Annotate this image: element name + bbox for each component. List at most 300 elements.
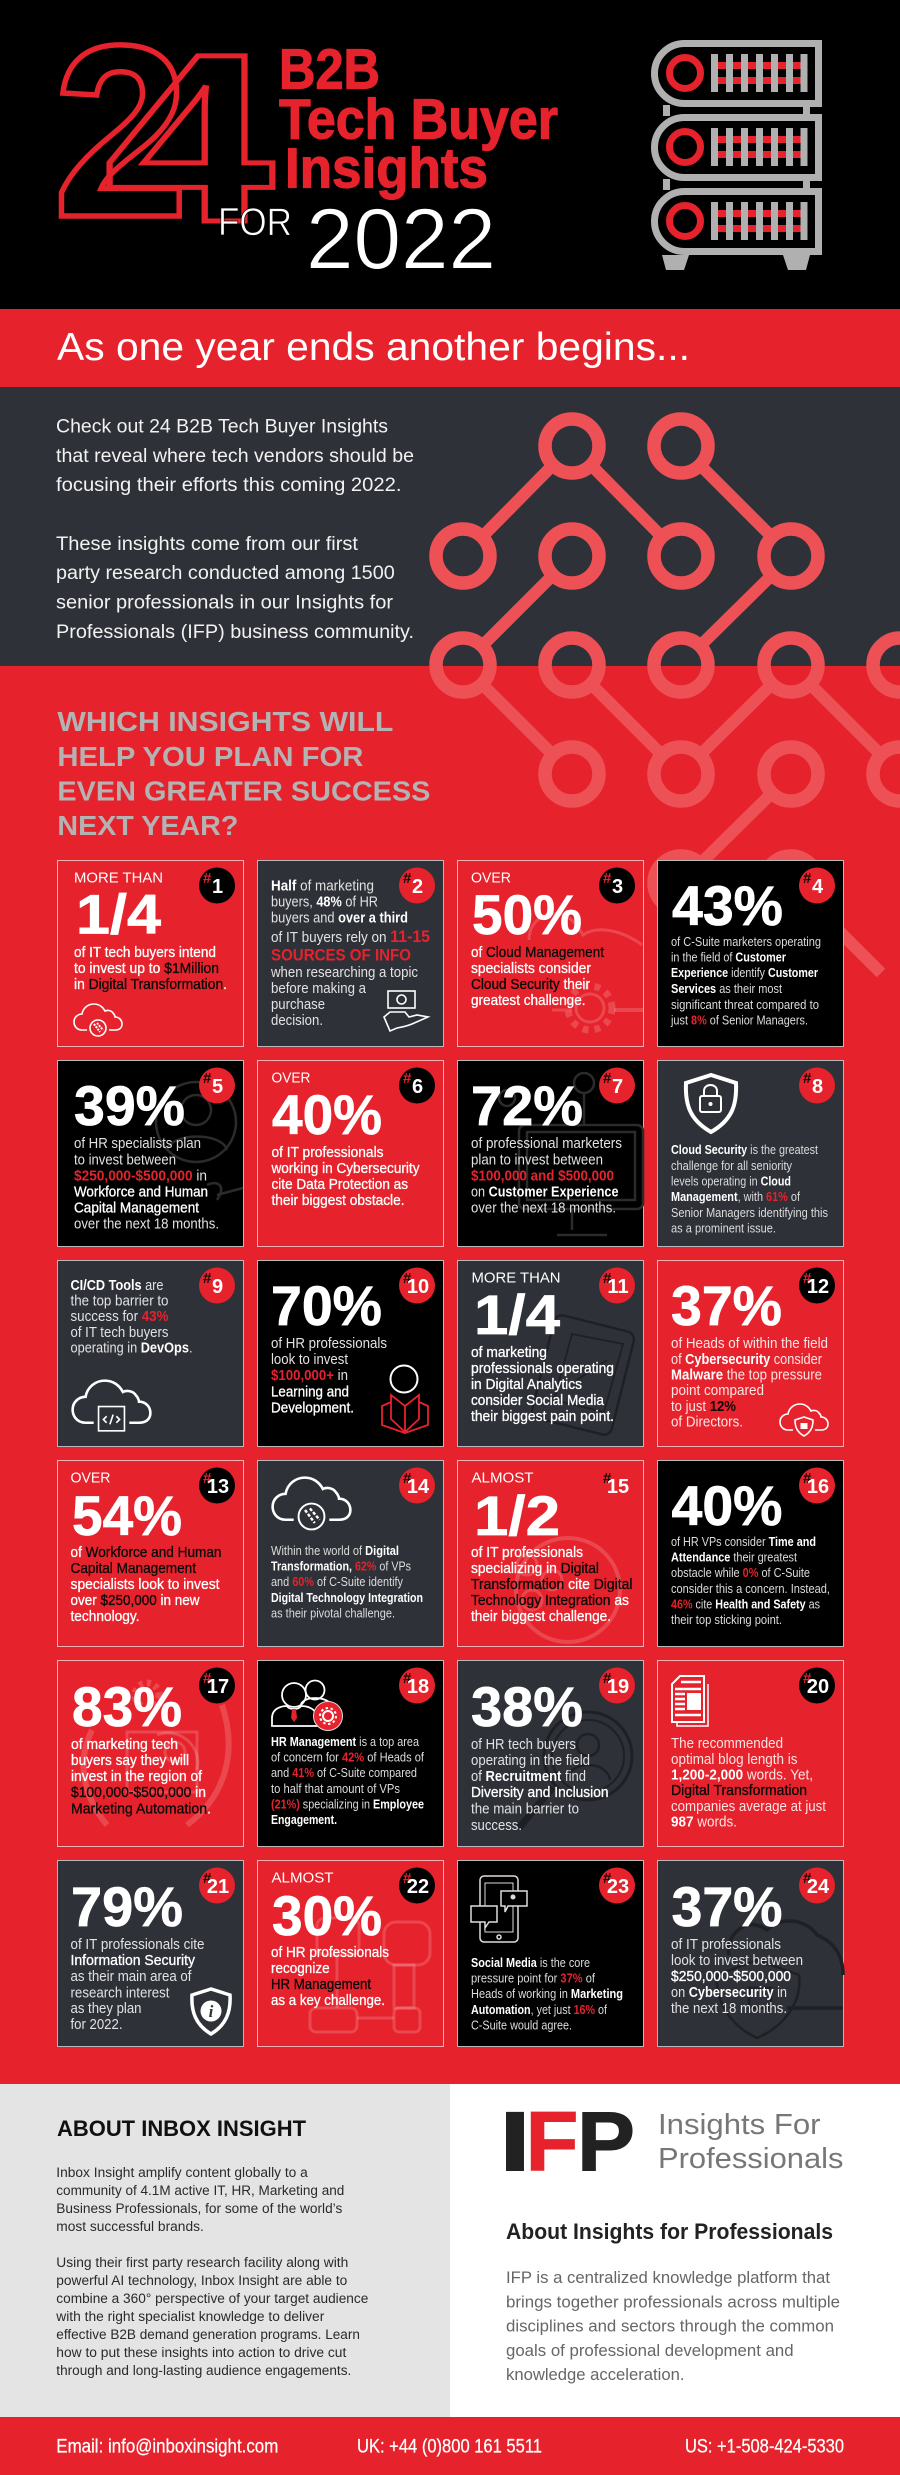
text 2: before making a bbox=[271, 981, 367, 997]
text 9: CI/CD Tools are bbox=[70, 1278, 164, 1294]
logo: IFP bbox=[499, 2095, 844, 2189]
text 12: of Heads of within the field bbox=[671, 1336, 828, 1352]
text 8: challenge for all seniority bbox=[671, 1158, 792, 1173]
text 1 bbox=[74, 945, 227, 993]
text 6: cite Data Protection as bbox=[272, 1177, 408, 1193]
badge 9: # bbox=[203, 1270, 212, 1287]
text 14: Within the world of Digital bbox=[271, 1543, 399, 1558]
text 12: to just 12% bbox=[671, 1399, 736, 1415]
badge 13: 13 bbox=[207, 1476, 229, 1498]
text 24 bbox=[671, 1937, 803, 2017]
text 19: success. bbox=[471, 1818, 522, 1834]
text 5 bbox=[74, 1136, 219, 1233]
text 2 bbox=[270, 879, 430, 1029]
badge 24 bbox=[799, 1868, 835, 1904]
card 8 bbox=[658, 1060, 844, 1246]
title: 2022 bbox=[306, 191, 496, 287]
badge 20 bbox=[799, 1668, 835, 1704]
card 17 bbox=[58, 1660, 244, 1846]
intro text: that reveal where tech vendors should be bbox=[56, 446, 414, 467]
text 22 bbox=[271, 1945, 389, 2009]
text 13: of Workforce and Human bbox=[70, 1545, 222, 1561]
badge 24: 24 bbox=[807, 1876, 830, 1898]
text 6: working in Cybersecurity bbox=[271, 1161, 420, 1177]
text 20: Digital Transformation bbox=[671, 1783, 807, 1799]
text 21: for 2022. bbox=[70, 2017, 122, 2033]
badge 23: 23 bbox=[607, 1876, 629, 1898]
text 16: obstacle while 0% of C-Suite bbox=[671, 1565, 810, 1580]
text 16: Attendance their greatest bbox=[671, 1550, 797, 1565]
header panel bbox=[0, 0, 900, 309]
badge 3 bbox=[599, 868, 635, 904]
icon: reader bbox=[382, 1366, 428, 1433]
card 23 bbox=[458, 1860, 644, 2046]
text 14 bbox=[271, 1543, 423, 1621]
icon: phone chat bbox=[471, 1876, 527, 1942]
stat 50%: OVER bbox=[471, 871, 511, 887]
badge 20: 20 bbox=[807, 1676, 829, 1698]
badge 4 bbox=[799, 868, 835, 904]
text 15: Technology Integration as bbox=[471, 1593, 629, 1609]
text 2: SOURCES OF INFO bbox=[271, 946, 411, 965]
logo: IFP: Professionals bbox=[658, 2143, 844, 2175]
network pattern bbox=[436, 419, 900, 973]
text 3: specialists consider bbox=[471, 961, 591, 977]
text 7: $100,000 and $500,000 bbox=[471, 1169, 614, 1185]
badge 12: # bbox=[803, 1270, 812, 1287]
title: Insights bbox=[285, 137, 488, 201]
text 24: on Cybersecurity in bbox=[671, 1985, 787, 2001]
panel: about inbox insight: powerful AI technology, Inbox Insight are able to bbox=[56, 2273, 347, 2288]
text 5: of HR specialists plan bbox=[74, 1136, 201, 1152]
stat 79%: 79% bbox=[71, 1875, 183, 1938]
heading: which insights: WHICH INSIGHTS WILL bbox=[57, 706, 393, 737]
text 18: and 41% of C-Suite compared bbox=[271, 1765, 417, 1780]
footer contact bar: UK: +44 (0)800 161 5511 bbox=[357, 2437, 542, 2458]
badge 19: # bbox=[603, 1670, 612, 1687]
panel: about ifp: About Insights for Professionals bbox=[506, 2219, 833, 2244]
text 4: just 8% of Senior Managers. bbox=[670, 1012, 808, 1028]
badge 9: 9 bbox=[212, 1276, 223, 1298]
text 4: Experience identify Customer bbox=[671, 965, 818, 980]
badge 3: # bbox=[603, 870, 612, 887]
text 9: the top barrier to bbox=[70, 1294, 168, 1310]
badge 22: 22 bbox=[407, 1876, 429, 1898]
text 17: $100,000-$500,000 in bbox=[71, 1785, 206, 1801]
intro text: senior professionals in our Insights for bbox=[56, 593, 394, 614]
badge 9 bbox=[199, 1268, 235, 1304]
icon: background monitor bbox=[499, 1073, 643, 1235]
text 23: pressure point for 37% of bbox=[471, 1971, 595, 1986]
text 18: to half that amount of VPs bbox=[271, 1781, 400, 1796]
text 2: purchase bbox=[271, 997, 325, 1013]
card 20 bbox=[658, 1660, 844, 1846]
text 19: the main barrier to bbox=[471, 1802, 579, 1818]
text 8: levels operating in Cloud bbox=[671, 1174, 791, 1189]
badge 7: # bbox=[603, 1070, 612, 1087]
text 23: Heads of working in Marketing bbox=[471, 1986, 623, 2001]
card 9 bbox=[58, 1260, 244, 1446]
text 11: their biggest pain point. bbox=[471, 1409, 614, 1425]
text 13: over $250,000 in new bbox=[70, 1593, 200, 1609]
title: 2 bbox=[53, 0, 189, 268]
panel: about ifp: disciplines and sectors through the common bbox=[506, 2318, 834, 2336]
logo: IFP: F bbox=[526, 2095, 578, 2189]
badge 13 bbox=[199, 1468, 235, 1504]
badge 3: 3 bbox=[612, 876, 623, 898]
stat 40%: OVER bbox=[272, 1071, 310, 1087]
text 5: to invest between bbox=[74, 1153, 176, 1169]
text 8: Cloud Security is the greatest bbox=[671, 1142, 818, 1157]
logo: IFP: Insights For bbox=[658, 2109, 821, 2141]
text 3: Cloud Security their bbox=[471, 977, 590, 993]
card 11 bbox=[458, 1260, 644, 1446]
title bbox=[53, 0, 558, 287]
badge 10: 10 bbox=[407, 1276, 429, 1298]
title: Tech Buyer bbox=[279, 88, 558, 152]
text 4: of C-Suite marketers operating bbox=[671, 934, 821, 949]
text 11: professionals operating bbox=[471, 1361, 614, 1377]
text 3 bbox=[471, 945, 604, 1009]
badge 14 bbox=[399, 1468, 435, 1504]
text 12: of Cybersecurity consider bbox=[671, 1352, 822, 1368]
panel: about ifp: knowledge acceleration. bbox=[506, 2366, 684, 2384]
badge 14: 14 bbox=[407, 1476, 430, 1498]
icon: background automation cycle bbox=[84, 1683, 229, 1825]
badge 21: 21 bbox=[207, 1876, 229, 1898]
stat 83%: 83% bbox=[72, 1675, 182, 1738]
text 8 bbox=[671, 1142, 828, 1236]
text 14: and 60% of C-Suite identify bbox=[271, 1574, 403, 1589]
stat 1/2: ALMOST bbox=[472, 1471, 534, 1487]
badge 11 bbox=[599, 1268, 635, 1304]
text 5: Capital Management bbox=[74, 1201, 199, 1217]
stat 37%: 37% bbox=[672, 1875, 782, 1938]
footer contact bar: Email: info@inboxinsight.com bbox=[56, 2437, 278, 2458]
text 20: 987 words. bbox=[671, 1815, 737, 1831]
text 14: Digital Technology Integration bbox=[271, 1590, 423, 1605]
text 23: C-Suite would agree. bbox=[471, 2018, 572, 2033]
icon: money in hand bbox=[384, 991, 428, 1031]
text 20: The recommended bbox=[671, 1736, 783, 1752]
text 12: of Directors. bbox=[671, 1415, 743, 1431]
stat 40%: 40% bbox=[672, 1474, 782, 1537]
badge 1: 1 bbox=[212, 876, 223, 898]
footer contact bar bbox=[0, 2417, 900, 2475]
text 15: of IT professionals bbox=[471, 1545, 583, 1561]
text 8: Management, with 61% of bbox=[671, 1189, 800, 1204]
text 5: $250,000-$500,000 in bbox=[74, 1169, 207, 1185]
text 20: 1,200-2,000 words. Yet, bbox=[671, 1768, 813, 1784]
badge 21: # bbox=[203, 1870, 212, 1887]
text 13: Capital Management bbox=[70, 1561, 196, 1577]
card 10 bbox=[258, 1260, 444, 1446]
intro text: Professionals (IFP) business community. bbox=[56, 622, 414, 643]
text 2: when researching a topic bbox=[270, 965, 418, 981]
panel: about ifp: brings together professionals across multiple bbox=[506, 2294, 840, 2312]
badge 18 bbox=[399, 1668, 435, 1704]
panel: about inbox insight: community of 4.1M active IT, HR, Marketing and bbox=[56, 2183, 344, 2198]
stat 54%: OVER bbox=[70, 1471, 110, 1487]
badge 12: 12 bbox=[807, 1276, 829, 1298]
stat 43%: 43% bbox=[672, 874, 783, 937]
text 19: of Recruitment find bbox=[471, 1769, 586, 1785]
text 23 bbox=[471, 1955, 623, 2033]
badge 2 bbox=[399, 868, 435, 904]
text 10: look to invest bbox=[271, 1352, 348, 1368]
badge 1: # bbox=[203, 870, 212, 887]
heading: which insights: NEXT YEAR? bbox=[57, 810, 238, 841]
icon: cloud code bbox=[73, 1381, 150, 1431]
text 4: significant threat compared to bbox=[671, 997, 819, 1012]
text 22: HR Management bbox=[271, 1977, 371, 1993]
text 23: Social Media is the core bbox=[471, 1955, 590, 1970]
badge 8 bbox=[799, 1068, 835, 1104]
text 24: the next 18 months. bbox=[671, 2001, 787, 2017]
text 16: of HR VPs consider Time and bbox=[671, 1534, 816, 1549]
stat 1/4: MORE THAN bbox=[472, 1271, 560, 1287]
text 22: as a key challenge. bbox=[271, 1993, 385, 2009]
text 13 bbox=[70, 1545, 222, 1625]
badge 15: # bbox=[603, 1470, 612, 1487]
text 19: Diversity and Inclusion bbox=[471, 1785, 608, 1801]
badge 16: 16 bbox=[807, 1476, 829, 1498]
badge 5: # bbox=[203, 1070, 212, 1087]
text 21 bbox=[70, 1937, 204, 2033]
badge 7 bbox=[599, 1068, 635, 1104]
text 1: of IT tech buyers intend bbox=[74, 945, 216, 961]
card 1 bbox=[58, 860, 244, 1046]
intro text: Check out 24 B2B Tech Buyer Insights bbox=[56, 417, 388, 438]
badge 11: # bbox=[603, 1270, 612, 1287]
text 2: decision. bbox=[271, 1013, 323, 1029]
text 21: as they plan bbox=[70, 2001, 142, 2017]
text 10: of HR professionals bbox=[271, 1336, 387, 1352]
text 17: invest in the region of bbox=[71, 1769, 203, 1785]
text 18: (21%) specializing in Employee bbox=[271, 1797, 424, 1812]
text 7: of professional marketers bbox=[471, 1136, 622, 1152]
text 7: on Customer Experience bbox=[471, 1185, 618, 1201]
text 16 bbox=[671, 1534, 830, 1627]
text 20 bbox=[671, 1736, 826, 1831]
text 9: operating in DevOps. bbox=[70, 1341, 192, 1357]
text 14: as their pivotal challenge. bbox=[271, 1606, 395, 1621]
text 21: research interest bbox=[70, 1985, 170, 2001]
text 2: buyers and over a third bbox=[271, 911, 408, 927]
text 6: of IT professionals bbox=[272, 1145, 384, 1161]
text 12 bbox=[671, 1336, 828, 1431]
icon: background phone bbox=[530, 1314, 636, 1436]
heading: which insights: HELP YOU PLAN FOR bbox=[57, 741, 363, 772]
badge 16 bbox=[799, 1468, 835, 1504]
text 17: of marketing tech bbox=[71, 1737, 178, 1753]
icon: cloud bbox=[273, 1478, 350, 1529]
panel: about inbox insight: through and long-lasting audience engagements. bbox=[56, 2363, 351, 2378]
text 4: Services as their most bbox=[671, 981, 782, 996]
banner: as one year ends: As one year ends another begins... bbox=[57, 326, 690, 369]
text 18: of concern for 42% of Heads of bbox=[271, 1750, 424, 1765]
badge 23 bbox=[599, 1868, 635, 1904]
text 9: success for 43% bbox=[70, 1309, 169, 1325]
badge 15: 15 bbox=[607, 1476, 629, 1498]
panel: about inbox insight: how to put these insights into action to drive cut bbox=[56, 2345, 347, 2360]
panel: about ifp: goals of professional development and bbox=[506, 2342, 794, 2360]
card 15 bbox=[458, 1460, 644, 1646]
icon: background magnifier bbox=[519, 1712, 632, 1828]
text 10: $100,000+ in bbox=[271, 1368, 348, 1384]
text 20: optimal blog length is bbox=[671, 1752, 798, 1768]
text 11: of marketing bbox=[471, 1345, 547, 1361]
badge 8: 8 bbox=[812, 1076, 823, 1098]
card 13 bbox=[58, 1460, 244, 1646]
icon: background hands bbox=[310, 1918, 430, 2032]
text 21: Information Security bbox=[70, 1953, 196, 1969]
badge 5 bbox=[199, 1068, 235, 1104]
stat 38%: 38% bbox=[471, 1675, 583, 1738]
text 17: buyers say they will bbox=[71, 1753, 189, 1769]
badge 1 bbox=[199, 868, 235, 904]
badge 22 bbox=[399, 1868, 435, 1904]
text 4 bbox=[670, 934, 821, 1028]
panel: about inbox insight: combine a 360° perspective of your target audience bbox=[56, 2291, 368, 2306]
intro text: focusing their efforts this coming 2022. bbox=[56, 475, 402, 496]
intro text: These insights come from our first bbox=[56, 534, 359, 555]
stat 1/4: 1/4 bbox=[474, 1283, 560, 1346]
badge 20: # bbox=[803, 1670, 812, 1687]
stat 30%: ALMOST bbox=[272, 1871, 334, 1887]
text 7: plan to invest between bbox=[471, 1153, 603, 1169]
text 6: their biggest obstacle. bbox=[272, 1193, 404, 1209]
panel: about inbox insight: Inbox Insight amplify content globally to a bbox=[56, 2165, 308, 2180]
text 12: Malware the top pressure bbox=[671, 1368, 822, 1384]
text 18 bbox=[271, 1734, 424, 1827]
card 16 bbox=[658, 1460, 844, 1646]
badge 17: # bbox=[203, 1670, 212, 1687]
badge 21 bbox=[199, 1868, 235, 1904]
card 7 bbox=[458, 1060, 644, 1246]
text 24: of IT professionals bbox=[671, 1937, 781, 1953]
badge 4: 4 bbox=[812, 876, 824, 898]
title: 4 bbox=[105, 4, 274, 272]
heading: which insights: EVEN GREATER SUCCESS bbox=[57, 776, 430, 807]
card 2 bbox=[258, 860, 444, 1046]
title: B2B bbox=[279, 38, 380, 102]
footer contact bar: US: +1-508-424-5330 bbox=[685, 2437, 844, 2458]
badge 2: 2 bbox=[412, 876, 423, 898]
text 19 bbox=[471, 1737, 608, 1834]
stat 72%: 72% bbox=[471, 1074, 583, 1137]
badge 24: # bbox=[803, 1870, 812, 1887]
text 24: $250,000-$500,000 bbox=[671, 1969, 791, 1985]
text 7: over the next 18 months. bbox=[471, 1201, 616, 1217]
text 3: of Cloud Management bbox=[471, 945, 604, 961]
text 11: in Digital Analytics bbox=[471, 1377, 582, 1393]
text 11 bbox=[471, 1345, 614, 1425]
badge 13: # bbox=[203, 1470, 212, 1487]
badge 23: # bbox=[603, 1870, 612, 1887]
text 6 bbox=[271, 1145, 420, 1209]
badge 5: 5 bbox=[212, 1076, 223, 1098]
badge 22: # bbox=[403, 1870, 412, 1887]
icon: info shield: i bbox=[209, 2002, 214, 2021]
badge 19 bbox=[599, 1668, 635, 1704]
text 11: consider Social Media bbox=[471, 1393, 605, 1409]
text 19: operating in the field bbox=[471, 1753, 590, 1769]
badge 6: 6 bbox=[412, 1076, 423, 1098]
panel: about ifp: IFP is a centralized knowledge platform that bbox=[506, 2269, 830, 2287]
icon: background people bbox=[156, 1082, 243, 1200]
text 2: of IT buyers rely on 11-15 bbox=[271, 927, 430, 946]
text 3: greatest challenge. bbox=[471, 993, 586, 1009]
icon: server rack bbox=[654, 44, 818, 270]
text 21: as their main area of bbox=[70, 1969, 192, 1985]
intro panel dark bbox=[0, 387, 900, 666]
stat 54%: 54% bbox=[72, 1484, 182, 1547]
icon: cloud bbox=[74, 1004, 122, 1036]
badge 14: # bbox=[403, 1470, 412, 1487]
text 1: in Digital Transformation. bbox=[74, 977, 227, 993]
icon: background cloud shield bbox=[717, 1921, 843, 2038]
stat 70%: 70% bbox=[271, 1274, 382, 1337]
text 24: look to invest between bbox=[671, 1953, 803, 1969]
icon: info shield bbox=[192, 1989, 230, 2034]
text 14: Transformation, 62% of VPs bbox=[271, 1559, 411, 1574]
badge 10: # bbox=[403, 1270, 412, 1287]
text 16: 46% cite Health and Safety as bbox=[671, 1597, 820, 1612]
text 18: Engagement. bbox=[271, 1812, 337, 1827]
icon: document bbox=[672, 1676, 708, 1726]
text 16: their top sticking point. bbox=[671, 1612, 782, 1627]
card 14 bbox=[258, 1460, 444, 1646]
banner: as one year ends bbox=[0, 309, 900, 387]
badge 10 bbox=[399, 1268, 435, 1304]
text 7 bbox=[471, 1136, 622, 1217]
intro text bbox=[56, 417, 414, 643]
badge 15 bbox=[603, 1470, 629, 1498]
stat 1/2: 1/2 bbox=[474, 1484, 560, 1547]
text 19: of HR tech buyers bbox=[471, 1737, 576, 1753]
text 2: buyers, 48% of HR bbox=[271, 895, 378, 911]
stat 50%: 50% bbox=[472, 883, 582, 946]
badge 11: 11 bbox=[607, 1276, 629, 1298]
text 15 bbox=[471, 1545, 632, 1625]
panel: about inbox insight: with the right specialist knowledge to deliver bbox=[55, 2309, 325, 2324]
stat 1/4: 1/4 bbox=[76, 882, 161, 946]
panel: about inbox insight: Using their first party research facility along with bbox=[56, 2255, 348, 2270]
icon: cloud shield bbox=[780, 1404, 828, 1436]
badge 19: 19 bbox=[607, 1676, 629, 1698]
text 9: of IT tech buyers bbox=[70, 1325, 168, 1341]
panel: about ifp bbox=[450, 2084, 900, 2417]
text 4: in the field of Customer bbox=[671, 950, 786, 965]
text 5: Workforce and Human bbox=[74, 1185, 208, 1201]
text 15: specializing in Digital bbox=[471, 1561, 599, 1577]
card 3 bbox=[458, 860, 644, 1046]
text 1: to invest up to $1Million bbox=[74, 961, 219, 977]
text 10: Learning and bbox=[271, 1385, 349, 1401]
text 22: recognize bbox=[271, 1961, 330, 1977]
text 8: Senior Managers identifying this bbox=[671, 1205, 828, 1220]
logo: IFP: P bbox=[577, 2095, 635, 2189]
panel: about inbox insight: most successful brands. bbox=[56, 2219, 204, 2234]
stat 39%: 39% bbox=[74, 1074, 185, 1137]
icon: hr people gear bbox=[272, 1680, 342, 1730]
card 18 bbox=[258, 1660, 444, 1846]
card 4 bbox=[658, 860, 844, 1046]
panel: about inbox insight: Business Professionals, for some of the world’s bbox=[56, 2201, 343, 2216]
card 22 bbox=[258, 1860, 444, 2046]
panel: about inbox insight: effective B2B demand generation programs. Learn bbox=[56, 2327, 360, 2342]
